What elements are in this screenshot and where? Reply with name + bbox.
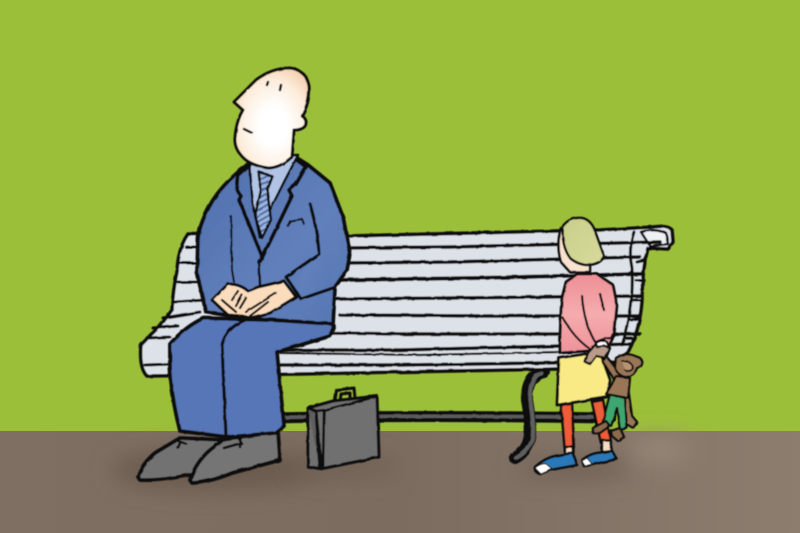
briefcase body [308,396,379,469]
monkey arm [603,356,622,384]
man [138,68,350,483]
man: trousers [170,318,334,437]
briefcase [308,388,379,469]
man: jacket [197,155,350,324]
bench [141,226,673,458]
child: skirt [557,352,610,405]
man: sleeve [286,204,333,299]
child: monkey toy [593,354,642,441]
bench cross bar [270,416,610,418]
monkey feet [593,421,610,433]
slat lines [145,242,660,365]
child [535,218,642,474]
monkey head [615,354,642,377]
man: tie [255,172,272,238]
bench slats [141,226,673,376]
ground: brown pavement [0,431,800,533]
monkey body [606,376,630,398]
bench leg [515,372,544,458]
child: hands [585,341,610,364]
man: hands [212,281,296,318]
man: shoes [138,432,280,483]
child: legs [561,400,612,456]
child: sweater [560,274,617,353]
man: head [234,68,309,168]
man: shirt [249,155,298,238]
briefcase handle [334,388,355,403]
child: hair [563,218,604,265]
man: lapels [237,166,262,262]
monkey trousers [602,394,627,430]
child: shoes [535,451,617,474]
child: neck and face [558,228,590,272]
